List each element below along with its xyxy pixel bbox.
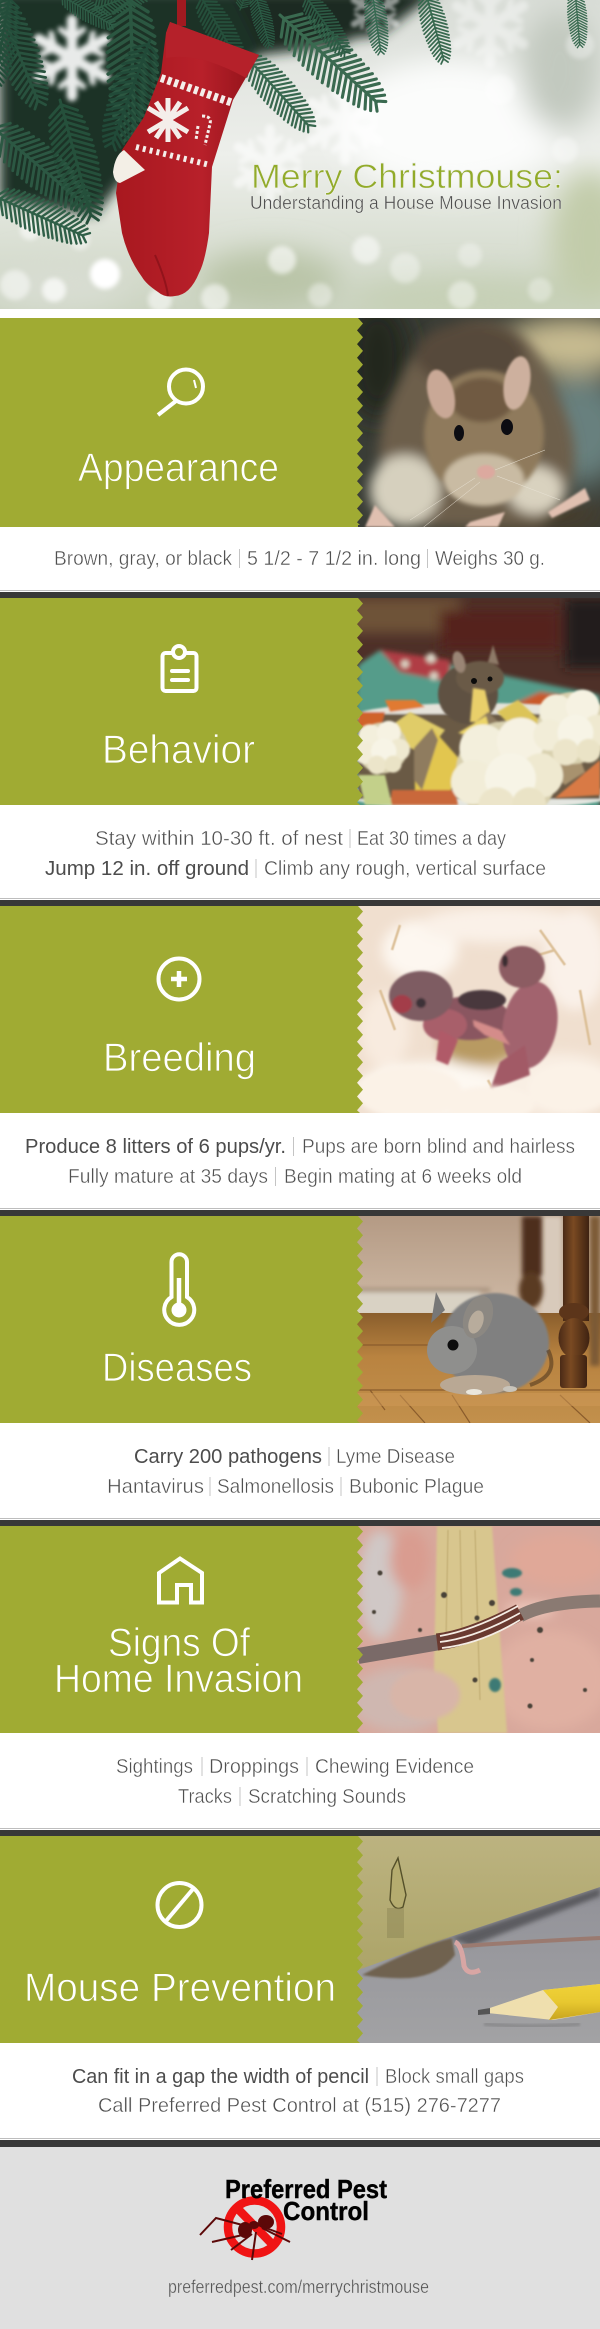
facts: Block small gaps xyxy=(385,2066,524,2088)
heading: Breeding xyxy=(103,1036,256,1080)
title: Merry Christmouse: xyxy=(251,158,563,196)
logo wordmark: Control xyxy=(283,2196,369,2226)
facts: Brown, gray, or black xyxy=(54,548,233,570)
mouse on plate xyxy=(438,645,504,724)
facts: Weighs 30 g. xyxy=(435,548,545,570)
heading: Appearance xyxy=(78,446,279,490)
facts xyxy=(107,1446,484,1498)
divider bar 6 xyxy=(0,2138,600,2147)
panel: breeding xyxy=(0,906,600,1188)
facts: Pups are born blind and hairless xyxy=(302,1136,575,1158)
header photo background xyxy=(0,0,600,324)
panel: appearance xyxy=(0,300,600,570)
dark tree mass xyxy=(0,0,440,215)
divider bar 5 xyxy=(0,1828,600,1836)
mouse under edge xyxy=(362,1938,455,1978)
logo: red prohibition ring xyxy=(228,2200,281,2254)
heading: Behavior xyxy=(102,728,255,772)
facts: Jump 12 in. off ground xyxy=(45,858,249,880)
bokeh lights xyxy=(0,31,594,312)
photo: chewed wires in insulation xyxy=(350,1526,600,1733)
chinchilla xyxy=(427,1292,551,1395)
green label panel xyxy=(0,1526,363,1733)
table legs xyxy=(519,1216,600,1366)
facts: Can fit in a gap the width of pencil xyxy=(72,2066,369,2088)
panel: signs of home invasion xyxy=(0,1526,600,1808)
straw strands xyxy=(380,925,590,1105)
divider bar 3 xyxy=(0,1208,600,1216)
icon: house xyxy=(159,1558,202,1602)
facts: Bubonic Plague xyxy=(349,1476,484,1498)
icon: thermometer xyxy=(164,1254,194,1325)
heading: Mouse Prevention xyxy=(24,1966,336,2010)
facts xyxy=(25,1136,575,1188)
photo: mouse squeezing under baseboard with pencil xyxy=(350,1836,600,2043)
photo: rodent on parquet floor xyxy=(350,1216,600,1423)
icon: prohibited circle xyxy=(158,1883,202,1927)
heading line 2: Home Invasion xyxy=(54,1657,303,1701)
mouse eyes xyxy=(454,419,513,441)
subtitle: Understanding a House Mouse Invasion xyxy=(250,193,562,213)
footer background xyxy=(0,2147,600,2329)
green label panel xyxy=(0,1216,363,1423)
photo: newborn pups in nest xyxy=(350,906,600,1122)
panel: mouse prevention xyxy=(0,1836,600,2117)
facts: Begin mating at 6 weeks old xyxy=(284,1166,522,1188)
logo wordmark: Preferred Pest xyxy=(225,2174,387,2204)
facts: Tracks xyxy=(178,1786,232,1808)
facts: Salmonellosis xyxy=(217,1476,334,1498)
logo: Preferred Pest Control xyxy=(200,2174,387,2260)
facts: Produce 8 litters of 6 pups/yr. xyxy=(25,1136,286,1158)
green label panel xyxy=(0,1836,363,2043)
facts: 5 1/2 - 7 1/2 in. long xyxy=(247,548,421,570)
facts xyxy=(45,828,546,880)
facts: Stay within 10-30 ft. of nest xyxy=(95,828,343,850)
facts: Call Preferred Pest Control at (515) 276-7277 xyxy=(98,2095,501,2117)
heading line 1: Signs Of xyxy=(108,1621,251,1665)
mouse tail xyxy=(462,1938,600,1946)
heading: Diseases xyxy=(102,1346,252,1390)
panel: diseases xyxy=(0,1216,600,1498)
debris and droppings xyxy=(372,1570,587,1708)
green label panel xyxy=(0,598,363,805)
pencil xyxy=(478,1984,600,2026)
logo: ant xyxy=(200,2215,290,2260)
lower fill xyxy=(0,524,358,527)
chewed ribbon wire xyxy=(358,1601,600,1656)
facts: Hantavirus xyxy=(107,1476,204,1498)
vegetables xyxy=(357,686,600,805)
green label panel xyxy=(0,318,363,525)
facts: Droppings xyxy=(209,1756,299,1778)
header: Christmas stocking photo with title xyxy=(0,0,600,324)
facts xyxy=(116,1756,474,1808)
turned leg xyxy=(558,1216,590,1388)
facts xyxy=(54,548,545,570)
snowflakes xyxy=(39,0,523,201)
icon: magnifying glass xyxy=(158,370,203,415)
wooden stud xyxy=(434,1526,507,1733)
logo wordmark xyxy=(225,2174,387,2226)
facts: Chewing Evidence xyxy=(315,1756,474,1778)
divider bar 4 xyxy=(0,1518,600,1526)
photo: brown mouse close-up xyxy=(357,318,600,527)
icon: red knit stocking xyxy=(113,0,259,296)
pine branches xyxy=(0,0,589,253)
facts: Carry 200 pathogens xyxy=(134,1446,322,1468)
parquet lines xyxy=(350,1345,600,1423)
facts: Scratching Sounds xyxy=(248,1786,406,1808)
divider bar 2 xyxy=(0,898,600,906)
green label panel xyxy=(0,906,363,1113)
icon: plus in circle xyxy=(158,958,200,1000)
mouse hind foot xyxy=(455,1942,480,1972)
facts: Sightings xyxy=(116,1756,193,1778)
pups xyxy=(389,946,564,1090)
icon: clipboard xyxy=(162,646,196,691)
fluff foreground xyxy=(367,1072,530,1113)
footer xyxy=(0,2147,600,2329)
facts: Lyme Disease xyxy=(336,1446,455,1468)
divider bar 1 xyxy=(0,590,600,598)
facts: Fully mature at 35 days xyxy=(68,1166,268,1188)
panel: behavior xyxy=(0,598,600,880)
photo: mouse on a plate of vegetables xyxy=(357,598,600,805)
footer url: preferredpest.com/merrychristmouse xyxy=(168,2277,429,2297)
facts: Eat 30 times a day xyxy=(357,828,506,850)
mouse whiskers xyxy=(410,450,560,530)
facts: Climb any rough, vertical surface xyxy=(264,858,546,880)
facts xyxy=(72,2066,524,2117)
